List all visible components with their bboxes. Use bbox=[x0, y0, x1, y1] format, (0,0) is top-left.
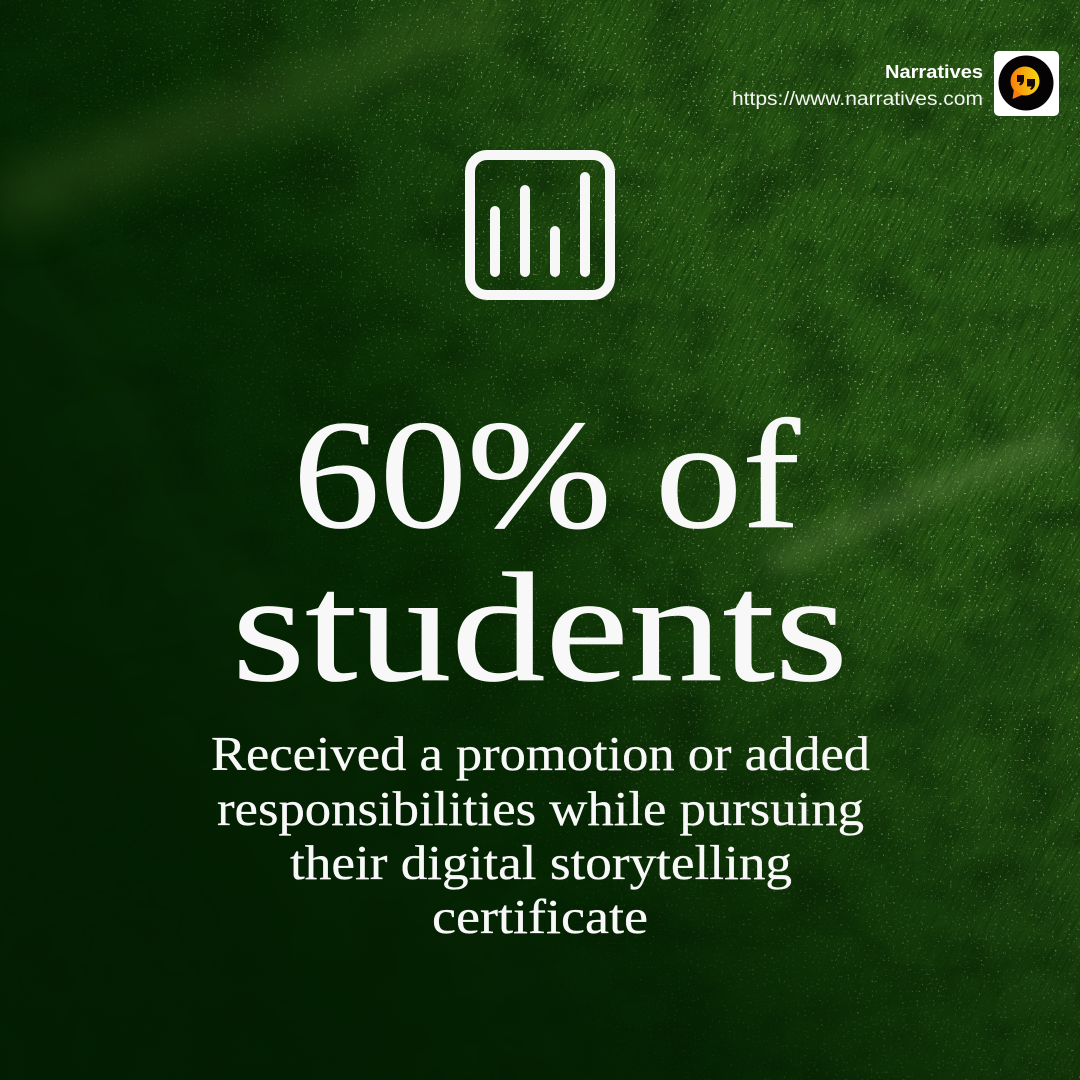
headline statistic: students bbox=[232, 541, 848, 714]
icon: speech bubble badge bbox=[994, 51, 1059, 116]
logo block: brand name, URL and badge bbox=[732, 51, 1059, 116]
headline statistic: 60% of bbox=[293, 388, 800, 561]
brand name: Narratives bbox=[885, 62, 983, 82]
website URL: https://www.narratives.com bbox=[732, 89, 983, 110]
supporting description: responsibilities while pursuing bbox=[217, 781, 864, 836]
supporting description bbox=[211, 726, 870, 944]
supporting description: certificate bbox=[432, 889, 648, 944]
icon: bar chart in rounded square bbox=[470, 155, 610, 295]
supporting description: their digital storytelling bbox=[290, 835, 792, 890]
supporting description: Received a promotion or added bbox=[211, 726, 870, 781]
headline statistic bbox=[232, 388, 848, 714]
